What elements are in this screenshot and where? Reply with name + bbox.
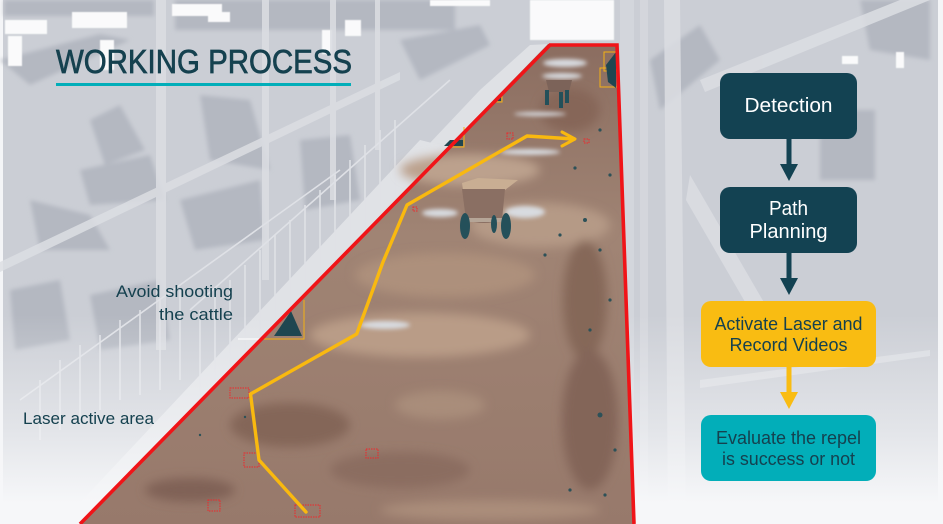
flow step: detection: Detection — [744, 95, 832, 117]
label: avoid shooting the cattle: Avoid shooting — [116, 282, 233, 301]
arrow: detection to path planning — [780, 139, 798, 181]
flow step: evaluate the repel — [701, 415, 876, 481]
laser active area outline — [80, 45, 634, 524]
flow step: path planning: Planning — [750, 221, 828, 243]
flow step: path planning — [720, 187, 857, 253]
title: WORKING PROCESS — [56, 43, 352, 80]
fence — [70, 44, 550, 524]
laser path — [250, 132, 575, 512]
flow step: path planning: Path — [769, 198, 808, 220]
label: avoid shooting the cattle — [116, 282, 233, 324]
arrow: path planning to activate laser — [780, 253, 798, 295]
far feed cart — [545, 80, 572, 108]
label: laser active area: Laser active area — [23, 409, 155, 428]
label: avoid shooting the cattle: the cattle — [159, 305, 233, 324]
flow step: activate laser and record videos: Record Videos — [730, 334, 848, 355]
detected cattle boxes — [238, 52, 617, 339]
flow step: evaluate the repel: is success or not — [722, 448, 855, 469]
flow step: activate laser and record videos — [701, 301, 876, 367]
flow step: evaluate the repel: Evaluate the repel — [716, 427, 861, 448]
cattle head at fence — [274, 52, 616, 336]
near feed cart — [460, 178, 518, 239]
flow step: detection — [720, 73, 857, 139]
laser targets — [208, 133, 589, 517]
laser active area: floor — [80, 44, 634, 524]
arrow: activate laser to evaluate — [780, 367, 798, 409]
flow step: activate laser and record videos: Activate Laser and — [714, 313, 862, 334]
